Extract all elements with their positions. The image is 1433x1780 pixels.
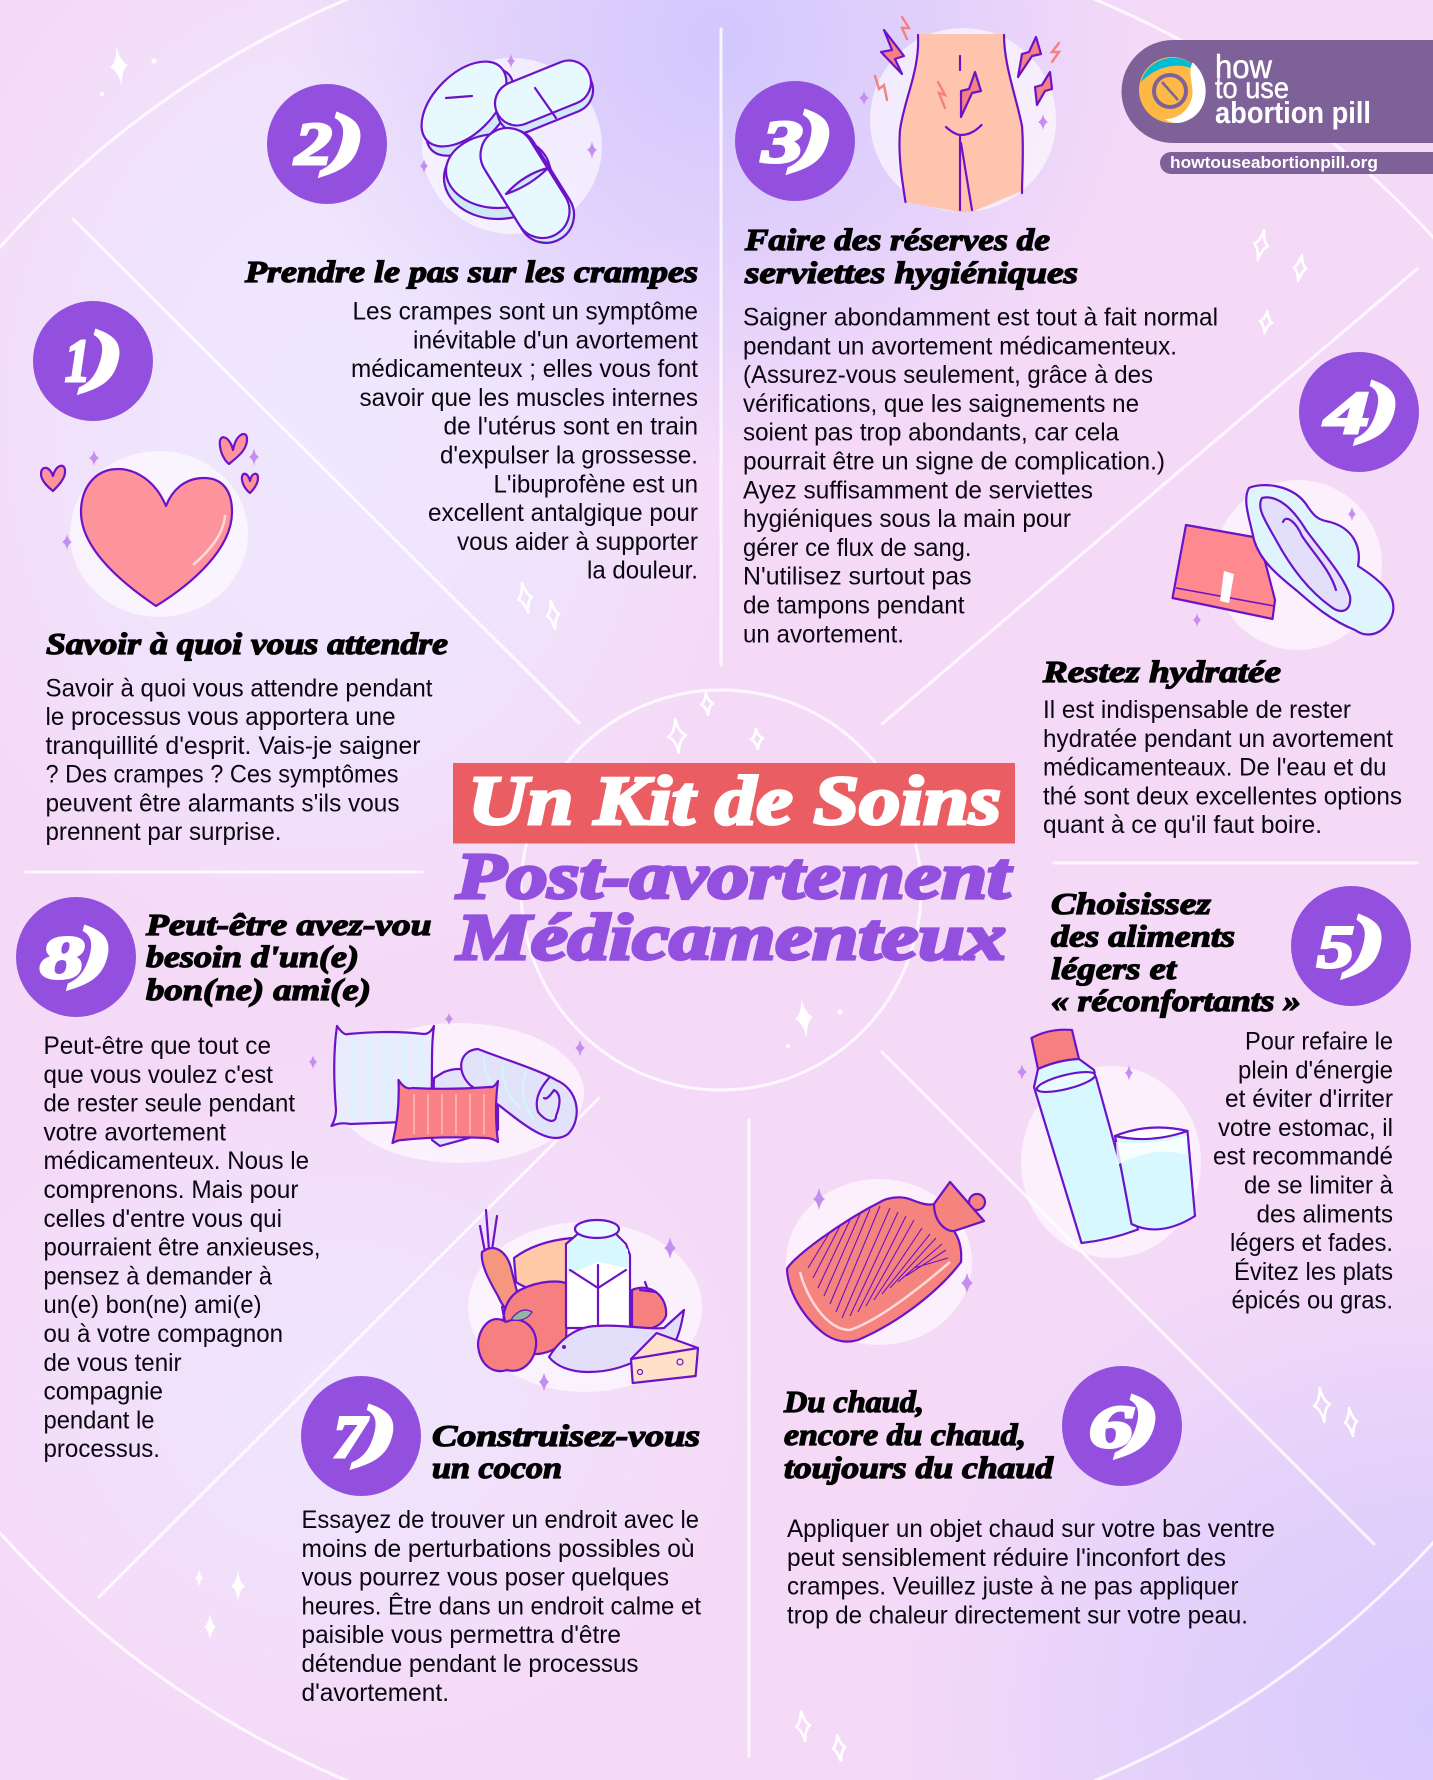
heading 8: Peut-être avez-vou	[145, 907, 432, 942]
text block 6: Appliquer un objet chaud sur votre bas ventre	[787, 1515, 1275, 1543]
logo wordmark	[1170, 48, 1378, 172]
panel 6: du chaud	[783, 1179, 1275, 1629]
text block 8: pendant le	[44, 1406, 154, 1434]
heading 6	[783, 1384, 1054, 1485]
heading 7	[432, 1418, 700, 1485]
text block 8: Peut-être que tout ce	[44, 1032, 271, 1060]
text block 3: un avortement.	[743, 620, 904, 648]
icon: sanitary pad and wrapper	[1172, 480, 1393, 650]
text block 6	[787, 1515, 1275, 1629]
heading 7: Construisez-vous	[432, 1418, 700, 1453]
badge 1: )	[78, 317, 124, 393]
text block 2: d'expulser la grossesse.	[440, 442, 698, 470]
text block 8: médicamenteux. Nous le	[44, 1147, 309, 1175]
text block 4	[1043, 696, 1402, 839]
text block 3: de tampons pendant	[743, 592, 965, 620]
text block 5: Pour refaire le	[1245, 1028, 1393, 1056]
text block 8: processus.	[44, 1435, 160, 1463]
text block 8: que vous voulez c'est	[44, 1061, 273, 1089]
heading 6: toujours du chaud	[784, 1450, 1054, 1485]
text block 2: vous aider à supporter	[457, 528, 698, 556]
panel 7: construisez-vous un cocon	[301, 1210, 702, 1707]
title: Post-avortement	[455, 840, 1012, 913]
panel 8: un(e) bon(ne) ami(e)	[16, 897, 585, 1463]
logo wordmark: how	[1215, 48, 1272, 85]
badge 1	[33, 301, 153, 421]
heading 5: légers et	[1051, 951, 1178, 986]
badge 7: )	[351, 1392, 398, 1468]
text block 5: des aliments	[1256, 1200, 1393, 1228]
text block 5: épicés ou gras.	[1232, 1287, 1393, 1315]
text block 3: vérifications, que les saignements ne	[743, 390, 1139, 418]
badge 2	[267, 84, 387, 204]
panel 2: prendre le pas sur les crampes	[244, 46, 698, 585]
text block 3: N'utilisez surtout pas	[743, 563, 972, 591]
text block 1: ? Des crampes ? Ces symptômes	[46, 761, 398, 789]
title	[453, 763, 1015, 974]
text block 8: votre avortement	[44, 1118, 226, 1146]
text block 8: celles d'entre vous qui	[44, 1205, 282, 1233]
title: Médicamenteux	[456, 901, 1006, 974]
heading 8	[145, 907, 432, 1007]
text block 2: savoir que les muscles internes	[360, 384, 698, 412]
text block 7: heures. Être dans un endroit calme et	[302, 1591, 701, 1620]
panel 3: serviettes hygiéniques	[735, 17, 1218, 648]
text block 5: et éviter d'irriter	[1225, 1085, 1393, 1113]
heading 6: encore du chaud,	[784, 1417, 1026, 1452]
badge 3	[735, 81, 855, 201]
heading 2: Prendre le pas sur les crampes	[244, 254, 698, 289]
badge 8: )	[67, 913, 113, 989]
text block 3	[743, 304, 1218, 648]
panel 5: aliments légers	[1017, 886, 1411, 1315]
text block 8: de rester seule pendant	[44, 1090, 295, 1118]
text block 8: pensez à demander à	[44, 1262, 272, 1290]
text block 2: médicamenteux ; elles vous font	[351, 355, 698, 383]
text block 8: de vous tenir	[44, 1349, 182, 1377]
heading 5: des aliments	[1051, 918, 1235, 954]
heading 8: besoin d'un(e)	[146, 939, 359, 974]
text block 8: un(e) bon(ne) ami(e)	[44, 1291, 262, 1319]
icon: hot water bottle	[786, 1179, 985, 1345]
text block 2: Les crampes sont un symptôme	[352, 298, 698, 326]
text block 5: est recommandé	[1213, 1143, 1393, 1171]
title: Un Kit de Soins	[468, 763, 1001, 840]
text block 6: crampes. Veuillez juste à ne pas appliquer	[787, 1573, 1238, 1601]
text block 6: trop de chaleur directement sur votre peau.	[787, 1601, 1248, 1629]
badge 6	[1062, 1366, 1182, 1486]
badge 6: )	[1114, 1382, 1160, 1458]
badge 5: )	[1342, 902, 1386, 978]
text block 5: légers et fades.	[1230, 1229, 1393, 1257]
text block 1: prennent par surprise.	[46, 818, 282, 846]
text block 2: excellent antalgique pour	[428, 499, 698, 527]
badge 4	[1299, 352, 1419, 472]
badge 4: 4	[1324, 380, 1369, 446]
badge 8: 8	[40, 925, 84, 991]
text block 7: d'avortement.	[302, 1679, 449, 1707]
heading 5: Choisissez	[1051, 886, 1211, 921]
text block 7: Essayez de trouver un endroit avec le	[302, 1506, 699, 1534]
text block 3: (Assurez-vous seulement, grâce à des	[743, 361, 1153, 389]
icon: pills	[406, 46, 602, 253]
badge 8	[16, 897, 136, 1017]
heading 3: serviettes hygiéniques	[744, 255, 1078, 290]
heading 5	[1051, 886, 1301, 1018]
text block 4: hydratée pendant un avortement	[1043, 725, 1393, 753]
text block 5: plein d'énergie	[1238, 1056, 1393, 1084]
text block 3: hygiéniques sous la main pour	[743, 505, 1071, 533]
badge 7: 7	[333, 1404, 368, 1470]
panel 1: savoir à quoi vous attendre	[33, 301, 448, 846]
badge 5	[1291, 886, 1411, 1006]
icon: heart	[41, 434, 259, 617]
text block 1	[46, 674, 433, 846]
icon: lower belly with cramps	[859, 17, 1059, 212]
text block 4: quant à ce qu'il faut boire.	[1043, 811, 1322, 839]
icon: water bottle and glass	[1017, 1030, 1201, 1258]
text block 4: Il est indispensable de rester	[1043, 696, 1351, 724]
heading 8: bon(ne) ami(e)	[146, 972, 371, 1007]
text block 8	[44, 1032, 320, 1463]
badge 5: 5	[1317, 914, 1354, 980]
heading 5: « réconfortants »	[1051, 983, 1301, 1018]
text block 5	[1213, 1028, 1393, 1315]
text block 7	[302, 1506, 701, 1707]
badge 2: )	[319, 100, 365, 176]
text block 1: peuvent être alarmants s'ils vous	[46, 789, 400, 817]
badge 1: 1	[65, 328, 90, 394]
text block 8: ou à votre compagnon	[44, 1320, 283, 1348]
heading 7: un cocon	[432, 1450, 562, 1485]
text block 1: Savoir à quoi vous attendre pendant	[46, 674, 433, 702]
logo wordmark: howtouseabortionpill.org	[1170, 153, 1378, 172]
text block 7: moins de perturbations possibles où	[302, 1535, 694, 1563]
text block 6: peut sensiblement réduire l'inconfort des	[787, 1544, 1226, 1572]
text block 1: tranquillité d'esprit. Vais-je saigner	[46, 732, 420, 760]
text block 3: Saigner abondamment est tout à fait normal	[743, 304, 1218, 332]
heading 3	[744, 222, 1078, 290]
logo	[1122, 40, 1433, 174]
text block 4: thé sont deux excellentes options	[1043, 782, 1402, 810]
text block 5: Évitez les plats	[1234, 1257, 1393, 1286]
text block 8: comprenons. Mais pour	[44, 1176, 298, 1204]
icon: pillows and blanket	[309, 1013, 585, 1163]
heading 6: Du chaud,	[783, 1384, 924, 1419]
panel 4: restez hydratée	[1042, 352, 1419, 839]
text block 2: la douleur.	[587, 557, 698, 585]
icon: food	[468, 1210, 702, 1392]
text block 5: votre estomac, il	[1218, 1114, 1393, 1142]
text block 1: le processus vous apportera une	[46, 703, 396, 731]
text block 3: pendant un avortement médicamenteux.	[743, 332, 1177, 360]
text block 5: de se limiter à	[1244, 1172, 1393, 1200]
badge 3: 3	[761, 109, 803, 175]
text block 2	[351, 298, 698, 585]
text block 8: pourraient être anxieuses,	[44, 1234, 320, 1262]
icon: logo pill	[1139, 57, 1205, 123]
badge 6: 6	[1089, 1394, 1133, 1460]
text block 3: Ayez suffisamment de serviettes	[743, 476, 1093, 504]
heading 1: Savoir à quoi vous attendre	[46, 626, 448, 661]
text block 8: compagnie	[44, 1378, 163, 1406]
text block 3: gérer ce flux de sang.	[743, 534, 972, 562]
logo wordmark: to use	[1215, 72, 1289, 105]
text block 3: soient pas trop abondants, car cela	[743, 419, 1119, 447]
text block 3: pourrait être un signe de complication.)	[743, 448, 1165, 476]
text block 4: médicamenteaux. De l'eau et du	[1043, 754, 1386, 782]
text block 2: inévitable d'un avortement	[413, 326, 698, 354]
heading 4: Restez hydratée	[1042, 654, 1281, 689]
badge 2: 2	[294, 111, 332, 177]
text block 7: vous pourrez vous poser quelques	[302, 1564, 669, 1592]
logo wordmark: abortion pill	[1215, 95, 1371, 130]
text block 7: détendue pendant le processus	[302, 1650, 638, 1678]
badge 3: )	[787, 97, 834, 173]
heading 3: Faire des réserves de	[744, 222, 1050, 257]
text block 7: paisible vous permettra d'être	[302, 1621, 621, 1649]
text block 2: de l'utérus sont en train	[444, 413, 698, 441]
badge 7	[301, 1376, 421, 1496]
badge 4: )	[1354, 368, 1400, 444]
text block 2: L'ibuprofène est un	[494, 470, 698, 498]
